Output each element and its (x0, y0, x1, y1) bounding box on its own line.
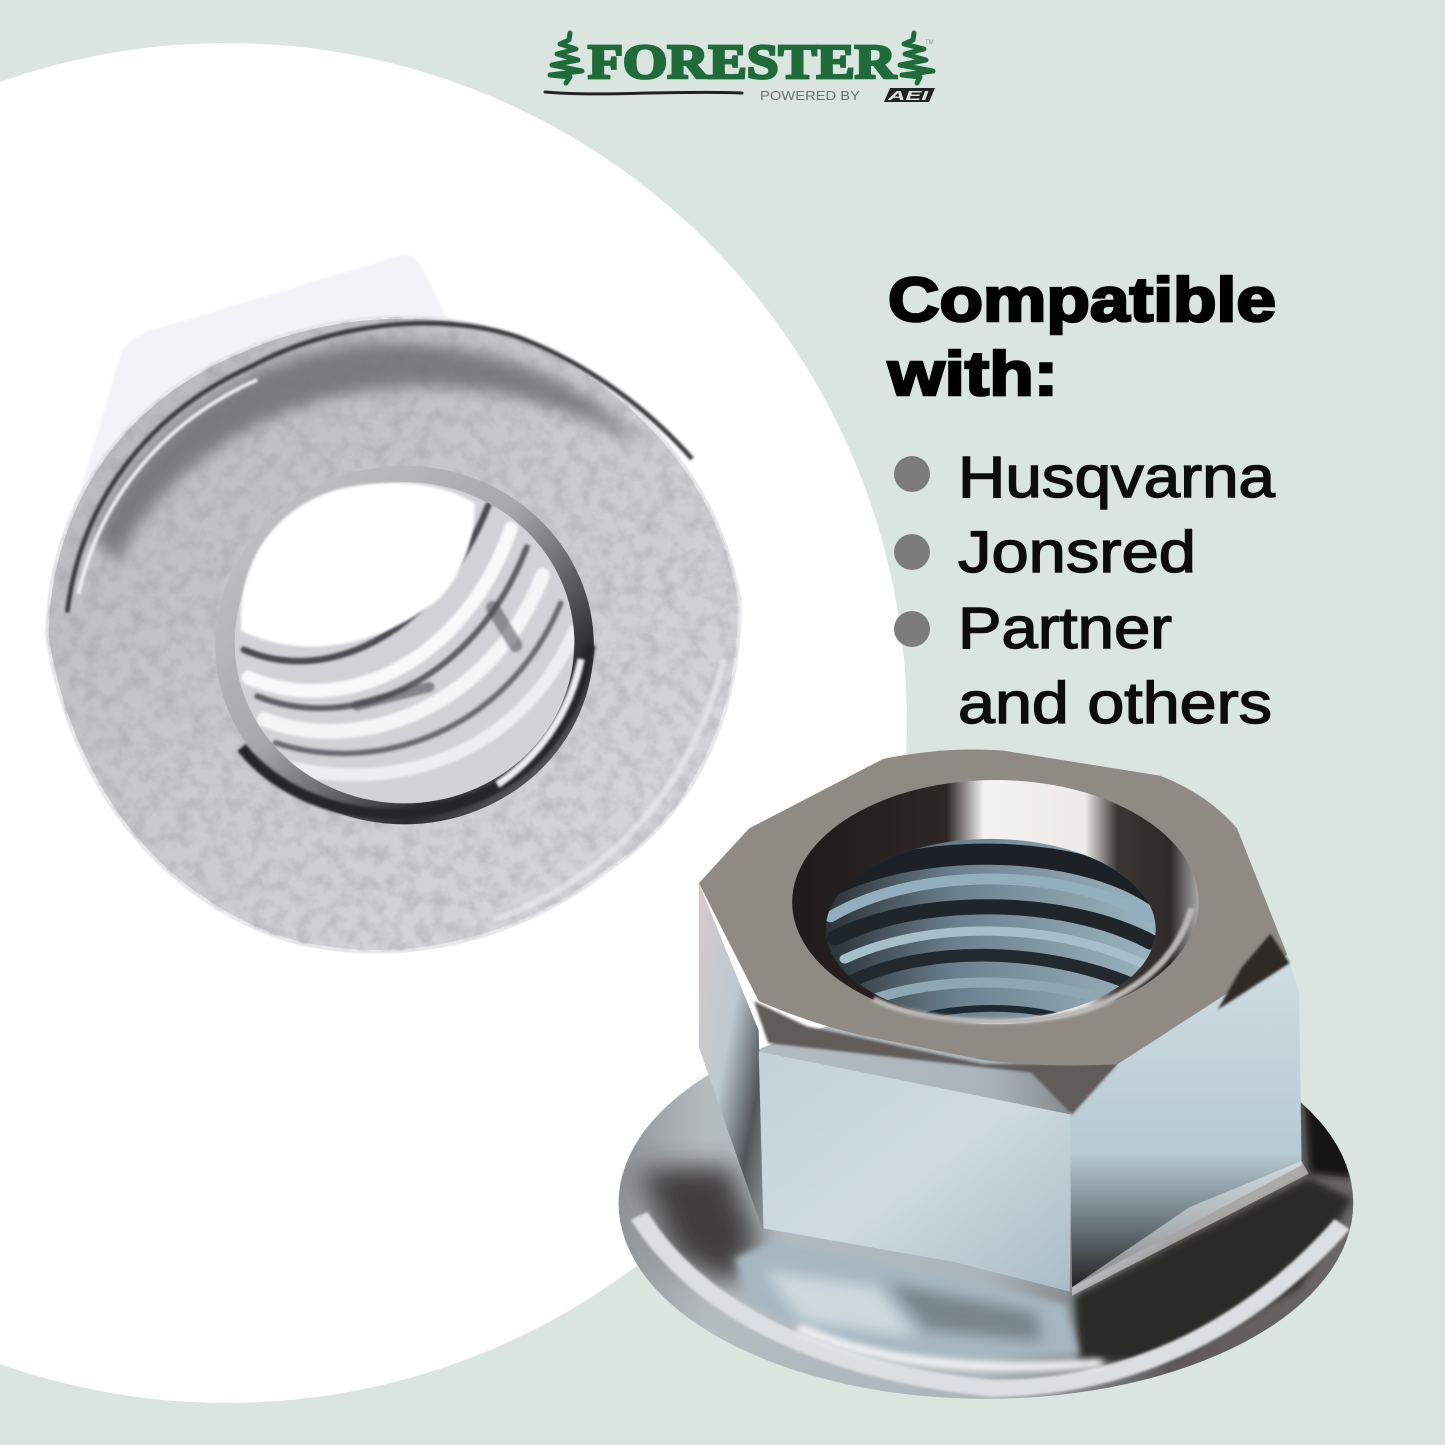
thread bore (826, 839, 1156, 1020)
hex left face (699, 883, 763, 1233)
brand names: Jonsred (958, 520, 1196, 585)
heading: compatible with: Compatible (888, 266, 1276, 335)
hex right face (1070, 955, 1302, 1287)
brand names (958, 445, 1276, 736)
powered by label: POWERED BY (760, 89, 861, 103)
lower flange highlight (493, 659, 724, 920)
white hex body behind flange (67, 255, 448, 603)
chamfer sparkle between faces (754, 1001, 1117, 1115)
list: compatible brands (894, 445, 1276, 736)
photo: flange nut, underside view (47, 255, 740, 952)
brand names: Partner (958, 596, 1172, 661)
AEI badge (884, 88, 935, 103)
dark corner on top face (1218, 934, 1290, 1009)
hex top face (699, 749, 1287, 1066)
logo: Forester powered by AEI (545, 33, 935, 103)
lower right bevel (1072, 1161, 1309, 1296)
brand names: Husqvarna (958, 445, 1276, 510)
bullet: Husqvarna (894, 456, 930, 492)
flange disc (47, 317, 740, 952)
trademark mark: TM (925, 40, 934, 46)
flange machining grain (47, 317, 740, 952)
heading: compatible with (887, 266, 1276, 409)
icon: left pine tree (550, 33, 582, 83)
dark lower bore edge (241, 645, 590, 814)
flange disc (619, 1007, 1353, 1399)
logo underline swoosh (545, 92, 742, 94)
thread bands (244, 505, 574, 775)
hole rim (215, 466, 594, 824)
thread bands (821, 854, 1156, 1018)
threaded bore (235, 482, 574, 803)
dark machined band on upper flange (94, 342, 642, 561)
flange shading (639, 1089, 1357, 1388)
countersink funnel (792, 780, 1199, 1024)
AEI badge: AEI (886, 88, 929, 103)
brand wordmark: FORESTER (588, 34, 897, 89)
white circle backdrop (0, 43, 907, 1403)
outer dark edge highlight (67, 323, 692, 612)
icon: right pine tree (900, 33, 933, 83)
lower funnel lip (873, 908, 1192, 1021)
bullet: Jonsred (894, 534, 930, 570)
heading: compatible with: with: (887, 340, 1058, 409)
photo: flange nut, hex top view (619, 749, 1357, 1399)
white bore opening (241, 483, 475, 647)
hex front face (759, 1052, 1072, 1292)
bullet: Partner (894, 611, 930, 647)
brand names: and others (958, 671, 1272, 736)
